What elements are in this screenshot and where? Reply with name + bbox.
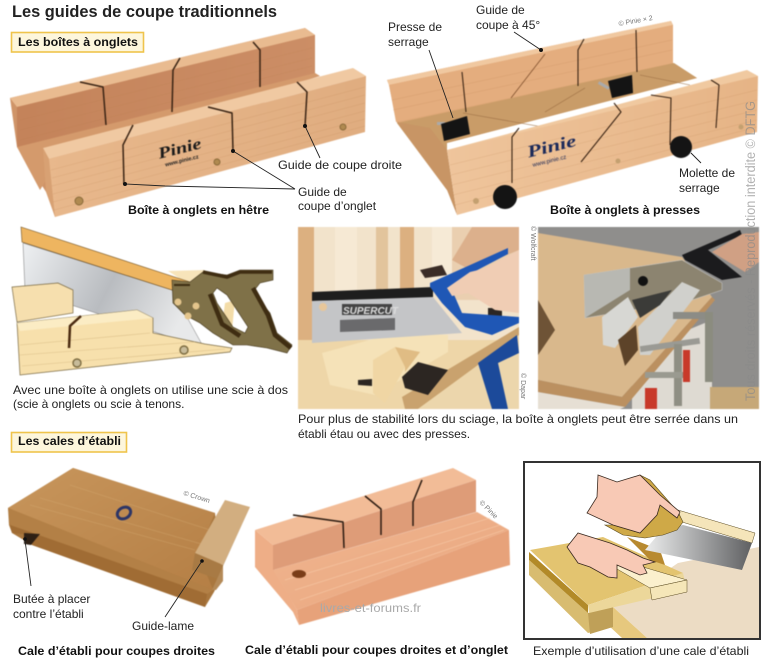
icon: presse de serrage avant xyxy=(437,116,470,141)
credit: Pinie x 2: © Pinie × 2 xyxy=(618,14,653,28)
title: Les guides de coupe traditionnels xyxy=(12,2,277,21)
label: guide de coupe d'onglet: coupe d’onglet xyxy=(298,199,377,213)
callout leaders: guides de coupe xyxy=(123,124,320,189)
icon: poignée de scie xyxy=(172,270,292,353)
caption: stabilité du sciage: Pour plus de stabilité lors du sciage, la boîte à onglets peut être serrée dans un xyxy=(298,412,738,426)
credit: Wolfcraft: © Wolfcraft xyxy=(529,226,537,261)
heading: les boîtes à onglets xyxy=(12,32,144,52)
label: guide de coupe d'onglet: Guide de xyxy=(298,185,347,199)
callout leaders: presse, guide 45, molette xyxy=(429,32,701,163)
caption: cale droites et onglet: Cale d’établi pour coupes droites et d’onglet xyxy=(245,643,508,657)
caption: stabilité du sciage: établi étau ou avec des presses. xyxy=(298,427,470,441)
illustration: utilisation de la cale xyxy=(524,462,760,639)
label: guide-lame: Guide-lame xyxy=(132,619,194,633)
vertical copyright: Tous droits réservés - Reproduction interdite © DFTG xyxy=(743,101,758,401)
photo: cale d'établi droites et onglet xyxy=(255,468,510,625)
label: molette de serrage: Molette de xyxy=(679,166,735,180)
label: presse de serrage: serrage xyxy=(388,35,429,49)
caption: cale pour coupes droites: Cale d’établi pour coupes droites xyxy=(18,644,215,658)
watermark: livres-et-forums.fr xyxy=(320,601,421,615)
credit: Crown: © Crown xyxy=(182,489,211,505)
illustration: scie à dos dans la boîte xyxy=(12,227,292,375)
icon: trou central xyxy=(115,505,133,521)
caption: scie à dos: Avec une boîte à onglets on utilise une scie à dos xyxy=(13,383,288,397)
label: molette de serrage: serrage xyxy=(679,181,720,195)
icon: molette arrière xyxy=(670,136,692,158)
credit: Pinie: © Pinie xyxy=(478,499,499,521)
photo: boîte à onglets à presses xyxy=(387,21,758,215)
caption: exemple d'utilisation: Exemple d’utilisation d’une cale d’établi xyxy=(533,644,749,658)
photo: cale d'établi pour coupes droites xyxy=(8,468,250,607)
label: butée à placer: contre l’établi xyxy=(13,607,84,621)
icon: main sur la poignée xyxy=(587,475,680,533)
logo: Pinie: Pinie xyxy=(524,131,579,162)
photo: boîte à onglets en hêtre xyxy=(10,28,366,217)
photo: scie SuperCut: SUPERCUT xyxy=(343,306,399,317)
photo: boîte à onglets métallique serrée xyxy=(538,227,759,409)
caption: boîte à onglets à presses: Boîte à onglets à presses xyxy=(550,203,700,217)
logo: Pinie: www.pinie.cz xyxy=(164,154,200,169)
logo: Pinie xyxy=(155,135,205,170)
callout leaders: butée et guide-lame xyxy=(23,537,204,617)
label: guide de coupe à 45°: Guide de xyxy=(476,3,525,17)
heading: les boîtes à onglets: Les boîtes à onglets xyxy=(18,35,138,49)
heading: les cales d'établi xyxy=(12,432,126,452)
label: guide de coupe à 45°: coupe à 45° xyxy=(476,18,540,32)
icon: poignée xyxy=(605,475,683,538)
caption: scie à dos: (scie à onglets ou scie à tenons. xyxy=(13,397,184,411)
logo: Pinie: www.pinie.cz xyxy=(531,155,567,169)
label: guide de coupe droite: Guide de coupe droite xyxy=(278,158,402,172)
icon: molette avant xyxy=(493,185,517,209)
credit: Dapar: © Dapar xyxy=(519,373,527,400)
logo: Pinie: Pinie xyxy=(155,135,203,163)
icon: presse de serrage arrière xyxy=(598,75,633,98)
caption: boîte à onglets en hêtre: Boîte à onglets en hêtre xyxy=(128,203,269,217)
label: presse de serrage: Presse de xyxy=(388,20,442,34)
photo: scie SuperCut xyxy=(298,227,519,409)
logo: Pinie xyxy=(524,131,581,170)
label: butée à placer: Butée à placer xyxy=(13,592,90,606)
heading: les cales d'établi: Les cales d’établi xyxy=(18,434,121,448)
icon: main sur la pièce xyxy=(567,533,655,578)
